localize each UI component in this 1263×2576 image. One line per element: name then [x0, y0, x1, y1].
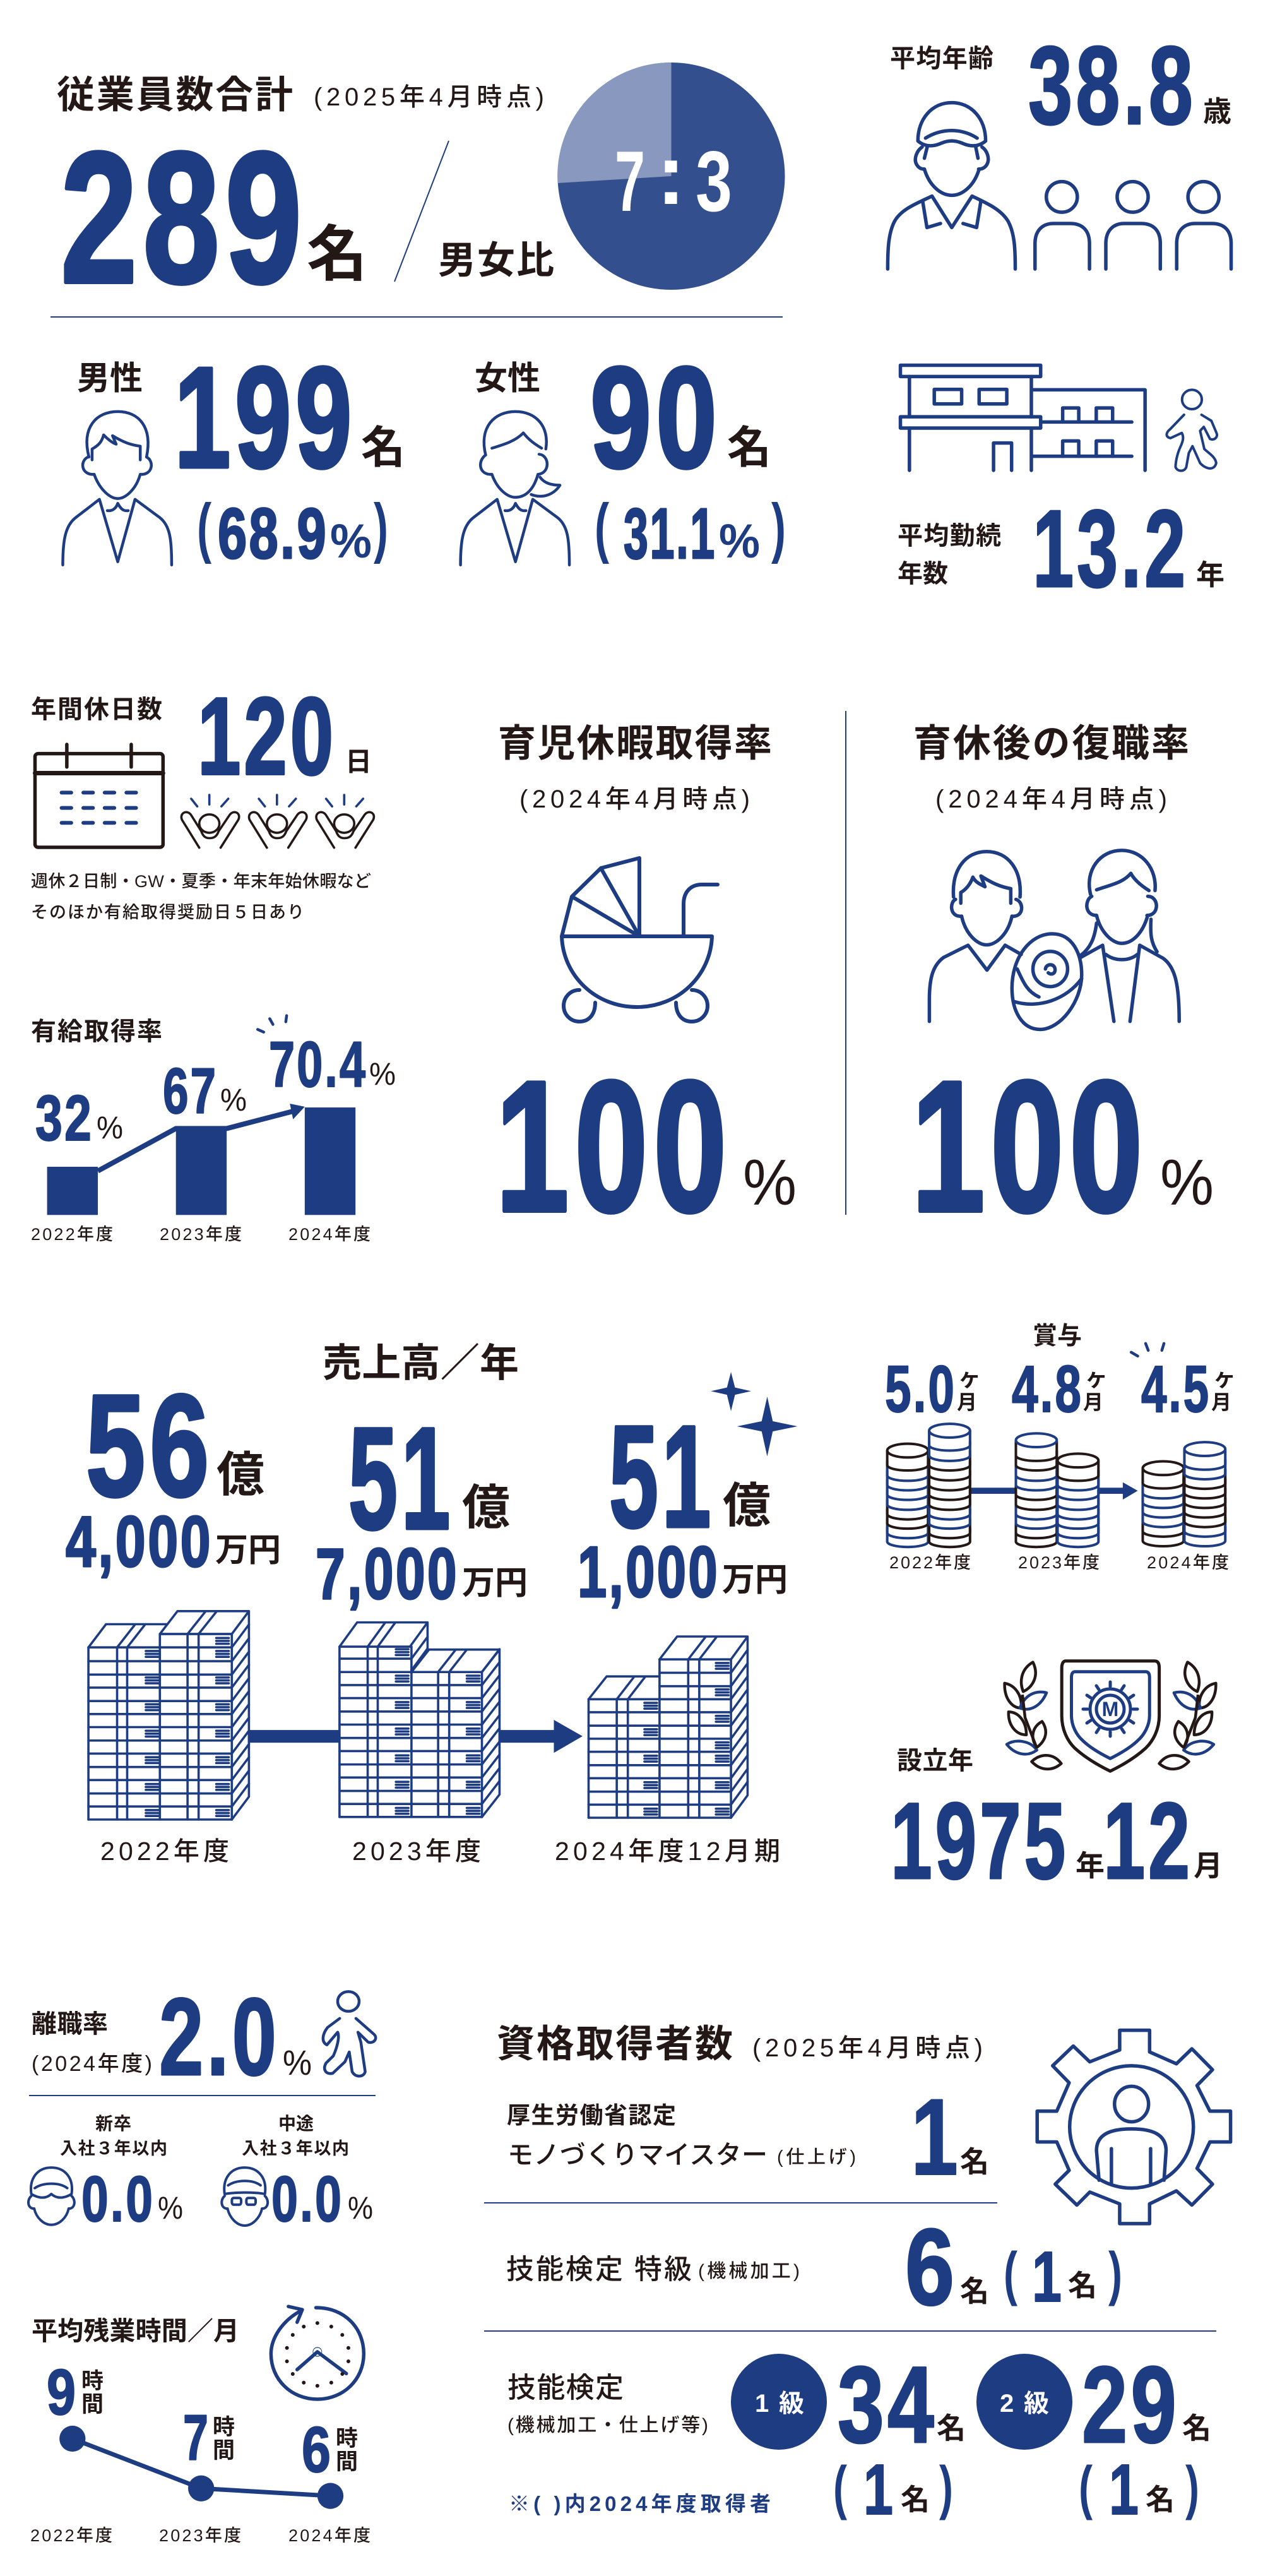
unit mark: ヶ [958, 1365, 981, 1391]
value: 67: 67 [163, 1055, 218, 1127]
date note: (2025年4月時点) [752, 2034, 983, 2062]
panel: average age [887, 24, 1231, 269]
date note: (2024年4月時点) [519, 785, 750, 813]
label: average overtime per month: 平均残業時間／月 [32, 2317, 239, 2346]
panel: qualified staff [484, 2023, 1231, 2529]
label: years: 年数 [898, 560, 948, 588]
icon: worker with cap [887, 103, 1015, 269]
icon: face with cap [28, 2168, 74, 2225]
year label 2024: 2024年度12月期 [555, 1837, 780, 1866]
unit: 時 [213, 2415, 235, 2440]
number: 12: 12 [1103, 1780, 1193, 1902]
icon: clock [271, 2306, 364, 2399]
unit: persons: 名 [307, 221, 367, 289]
icon: man [62, 412, 172, 565]
percent sign: % [1160, 1146, 1214, 1219]
unit: 名 [937, 2412, 966, 2445]
year label 2022: 2022年度 [30, 2526, 112, 2545]
label: paid leave rate: 有給取得率 [31, 1018, 162, 1046]
number: 2.0: 2.0 [159, 1975, 280, 2098]
icon: document stack 2022 [88, 1611, 249, 1820]
icon: baby stroller [562, 858, 718, 1022]
badge: grade 2 [976, 2354, 1072, 2450]
unit: 名 [960, 2275, 989, 2308]
label: gender ratio: 男女比 [438, 239, 554, 282]
number: 29: 29 [1082, 2344, 1180, 2466]
year label 2023: 2023年度 [159, 2526, 241, 2545]
panel: childcare leave rate [495, 722, 797, 1251]
label: mid-career: 中途 [278, 2114, 314, 2133]
arrow: bonus trend [970, 1482, 1138, 1500]
percent: 68.9: 68.9 [218, 494, 328, 573]
percent sign: % [369, 1056, 396, 1092]
badge: grade 2: 2級 [1000, 2390, 1049, 2418]
value: 0.0: 0.0 [271, 2163, 343, 2235]
year label 2024: 2024年度 [1147, 1553, 1229, 1572]
value: 4.5: 4.5 [1141, 1352, 1211, 1426]
year label 2024: 2024年度 [288, 1225, 371, 1244]
icon: right laurel [1159, 1662, 1216, 1769]
pie chart: gender ratio: : [656, 126, 685, 222]
heading: total employees: 従業員数合計 [57, 74, 293, 116]
panel: female employees [461, 338, 786, 573]
slash divider [394, 141, 449, 282]
pie chart: gender ratio [557, 63, 785, 290]
icon: calendar [35, 744, 163, 847]
unit: 時 [81, 2369, 104, 2394]
unit: 名 [361, 423, 405, 472]
number: 38.8: 38.8 [1028, 24, 1196, 148]
unit: days: 日 [345, 747, 372, 777]
unit: 名 [727, 423, 771, 472]
percent sign: % [330, 515, 372, 568]
label: female: 女性 [475, 361, 540, 397]
sparkle rays [258, 1016, 287, 1032]
label: annual holidays: 年間休日数 [31, 696, 162, 724]
icon: coin stacks 2022 [887, 1424, 970, 1547]
panel: average tenure [898, 365, 1224, 610]
label: special grade skill test: 技能検定 特級 [506, 2254, 692, 2285]
panel: annual sales [66, 1342, 797, 1866]
note: machining: (機械加工) [698, 2261, 800, 2282]
icon: document stack 2023 [340, 1623, 499, 1817]
open paren: ( [1079, 2454, 1093, 2521]
unit: 間 [213, 2438, 235, 2463]
label: within three years: 入社３年以内 [242, 2139, 349, 2158]
unit: 億 [216, 1448, 264, 1502]
value: 1,000: 1,000 [578, 1532, 720, 1613]
year label 2024: 2024年度 [288, 2526, 371, 2545]
number: 90: 90 [590, 338, 721, 498]
label: average tenure: 平均勤続 [898, 522, 1001, 550]
value: 5.0: 5.0 [885, 1352, 956, 1426]
label: new graduates: 新卒 [95, 2114, 131, 2133]
icon: face with cap and glasses [222, 2168, 268, 2226]
year label 2022: 2022年度 [889, 1553, 971, 1572]
close paren: ) [1108, 2240, 1122, 2307]
close paren: ) [374, 491, 388, 564]
label: within three years: 入社３年以内 [60, 2139, 167, 2158]
number: 34: 34 [838, 2344, 937, 2466]
value: 4,000: 4,000 [66, 1502, 213, 1582]
label: turnover rate: 離職率 [32, 2010, 108, 2038]
icon: colleagues [1035, 182, 1231, 269]
icon: coin stacks 2023 [1016, 1433, 1098, 1547]
unit: 万円 [722, 1562, 788, 1599]
icon: three cheering people [181, 795, 374, 848]
number: 199: 199 [174, 338, 356, 498]
number: 120: 120 [198, 674, 336, 797]
unit month: 月 [1083, 1391, 1103, 1414]
label: skill test: 技能検定 [507, 2371, 624, 2404]
year label 2023: 2023年度 [352, 1837, 481, 1866]
value: 6 hours: 6 [302, 2414, 331, 2486]
percent sign: % [283, 2042, 312, 2082]
panel: turnover rate [28, 1975, 376, 2235]
panel: founding year [891, 1661, 1223, 1902]
heading: annual sales: 売上高／年 [323, 1342, 519, 1385]
heading: qualified staff: 資格取得者数 [497, 2023, 733, 2065]
value: 70.4: 70.4 [269, 1029, 367, 1100]
arrow: sales trend [248, 1720, 583, 1753]
percent sign: % [97, 1110, 123, 1145]
footnote: ※( )内2024年度取得者 [509, 2492, 771, 2515]
note: paid leave incentive: そのほか有給取得奨励日５日あり [31, 903, 304, 922]
panel: return to work rate [911, 722, 1214, 1251]
icon: company shield [1062, 1661, 1159, 1771]
unit: 万円 [215, 1532, 281, 1569]
line chart: overtime hours [59, 2426, 343, 2509]
value: 9 hours: 9 [47, 2356, 76, 2428]
year label 2022: 2022年度 [100, 1837, 229, 1866]
number: 13.2: 13.2 [1033, 487, 1189, 610]
bar chart: paid leave rate [47, 1104, 355, 1215]
value: 0.0: 0.0 [81, 2163, 155, 2235]
panel: paid leave rate [31, 1016, 396, 1244]
unit: 間 [336, 2450, 358, 2474]
panel: annual holidays [31, 674, 374, 922]
number: 1: 1 [1109, 2450, 1139, 2529]
icon: company shield: M [1102, 1698, 1118, 1720]
panel: male employees [62, 338, 405, 573]
year label 2023: 2023年度 [1018, 1553, 1100, 1572]
note: finishing: (仕上げ) [777, 2147, 856, 2168]
year label 2023: 2023年度 [160, 1225, 242, 1244]
percent sign: % [220, 1082, 247, 1118]
panel: total employees [57, 63, 785, 322]
icon: woman [461, 412, 569, 565]
icon: walking person [1166, 390, 1217, 471]
label: fiscal 2024: (2024年度) [32, 2052, 152, 2076]
unit: 万円 [462, 1565, 528, 1602]
number: 1975: 1975 [891, 1780, 1069, 1902]
percent sign: % [158, 2190, 183, 2226]
heading: bonus: 賞与 [1033, 1323, 1082, 1350]
date note: (2024年4月時点) [935, 785, 1167, 813]
year label 2022: 2022年度 [31, 1225, 113, 1244]
open paren: ( [833, 2454, 847, 2521]
open paren: ( [197, 491, 211, 564]
unit month: 月 [957, 1391, 977, 1414]
value: 7,000: 7,000 [316, 1534, 459, 1614]
unit: year: 年 [1076, 1849, 1105, 1882]
label: monozukuri meister: モノづくりマイスター [507, 2140, 768, 2169]
unit: years old: 歳 [1203, 95, 1231, 128]
close paren: ) [1185, 2454, 1199, 2521]
number: 1: 1 [911, 2077, 958, 2198]
icon: sparkles [711, 1372, 797, 1457]
icon: left laurel [1005, 1662, 1061, 1769]
unit mark: ヶ [1085, 1365, 1108, 1391]
badge: grade 1 [731, 2354, 827, 2450]
unit: 億 [462, 1481, 510, 1535]
icon: gear with person [1037, 2030, 1231, 2224]
unit: 名 [960, 2145, 989, 2178]
number: 289: 289 [61, 113, 307, 322]
note: machining and finishing: (機械加工・仕上げ等) [507, 2415, 708, 2436]
unit mark: ヶ [1213, 1365, 1236, 1391]
sparkle rays [1131, 1344, 1164, 1356]
unit: 億 [723, 1479, 771, 1533]
percent: 31.1: 31.1 [624, 494, 716, 573]
value: 32: 32 [35, 1082, 93, 1154]
pie chart: gender ratio: 3 [696, 133, 732, 229]
label: ministry certified: 厚生労働省認定 [507, 2102, 676, 2128]
close paren: ) [939, 2454, 953, 2521]
open paren: ( [595, 491, 609, 564]
unit: 時 [336, 2426, 358, 2451]
value: 56 oku: 56 [86, 1364, 213, 1527]
number: 1: 1 [1032, 2237, 1062, 2317]
unit month: 月 [1211, 1391, 1231, 1414]
heading: childcare leave rate: 育児休暇取得率 [498, 722, 772, 765]
percent sign: % [719, 515, 760, 568]
note: holiday details: 週休２日制・GW・夏季・年末年始休暇など [31, 872, 371, 891]
icon: parents with baby [929, 850, 1179, 1029]
number: 100: 100 [911, 1042, 1148, 1251]
badge: grade 1: 1級 [755, 2390, 804, 2418]
percent sign: % [743, 1146, 797, 1219]
date note: (2025年4月時点) [314, 83, 544, 111]
number: 1: 1 [863, 2450, 893, 2529]
label: average age: 平均年齢 [890, 45, 993, 73]
unit: 名 [1068, 2269, 1097, 2302]
pie chart: gender ratio: 7 [615, 133, 645, 229]
unit: 名 [1146, 2483, 1175, 2516]
value: 7 hours: 7 [183, 2402, 208, 2474]
unit: 名 [901, 2483, 930, 2516]
unit: month: 月 [1194, 1849, 1223, 1882]
unit: year: 年 [1196, 559, 1224, 591]
icon: coin stacks 2024 [1142, 1442, 1225, 1546]
label: male: 男性 [77, 361, 143, 397]
number: 100: 100 [495, 1042, 732, 1251]
panel: bonus [885, 1323, 1236, 1572]
number: 6: 6 [905, 2207, 954, 2328]
value: 51 oku: 51 [348, 1397, 454, 1559]
close paren: ) [771, 491, 786, 564]
panel: average overtime [30, 2306, 371, 2545]
percent sign: % [348, 2190, 373, 2226]
icon: document stack 2024 [589, 1637, 747, 1818]
unit: 名 [1182, 2412, 1211, 2445]
icon: factory building [901, 365, 1145, 470]
label: founded: 設立年 [897, 1747, 973, 1775]
icon: person leaving [323, 1991, 376, 2076]
heading: return to work rate: 育休後の復職率 [913, 722, 1189, 765]
value: 51 oku: 51 [609, 1395, 715, 1558]
open paren: ( [1004, 2240, 1017, 2307]
value: 4.8: 4.8 [1012, 1352, 1083, 1426]
unit: 間 [81, 2392, 104, 2417]
